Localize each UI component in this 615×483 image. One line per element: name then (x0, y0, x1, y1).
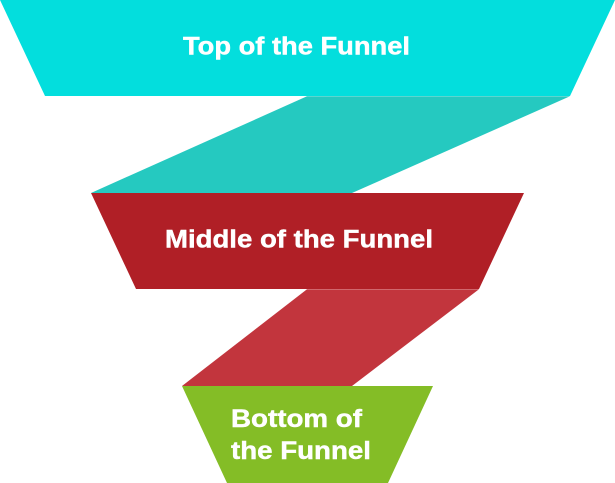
heading: bottom of the funnel (231, 405, 371, 465)
heading: bottom of the funnel: Bottom of (231, 405, 363, 433)
heading: top of the funnel: Top of the Funnel (183, 32, 410, 60)
connector: middle to bottom (182, 289, 479, 386)
heading: bottom of the funnel: the Funnel (231, 437, 371, 465)
panel: top of the funnel (0, 0, 615, 96)
connector: top to middle (91, 96, 570, 193)
heading: middle of the funnel: Middle of the Funnel (165, 226, 433, 254)
panel: middle of the funnel (91, 193, 524, 289)
panel: bottom of the funnel (182, 386, 433, 483)
